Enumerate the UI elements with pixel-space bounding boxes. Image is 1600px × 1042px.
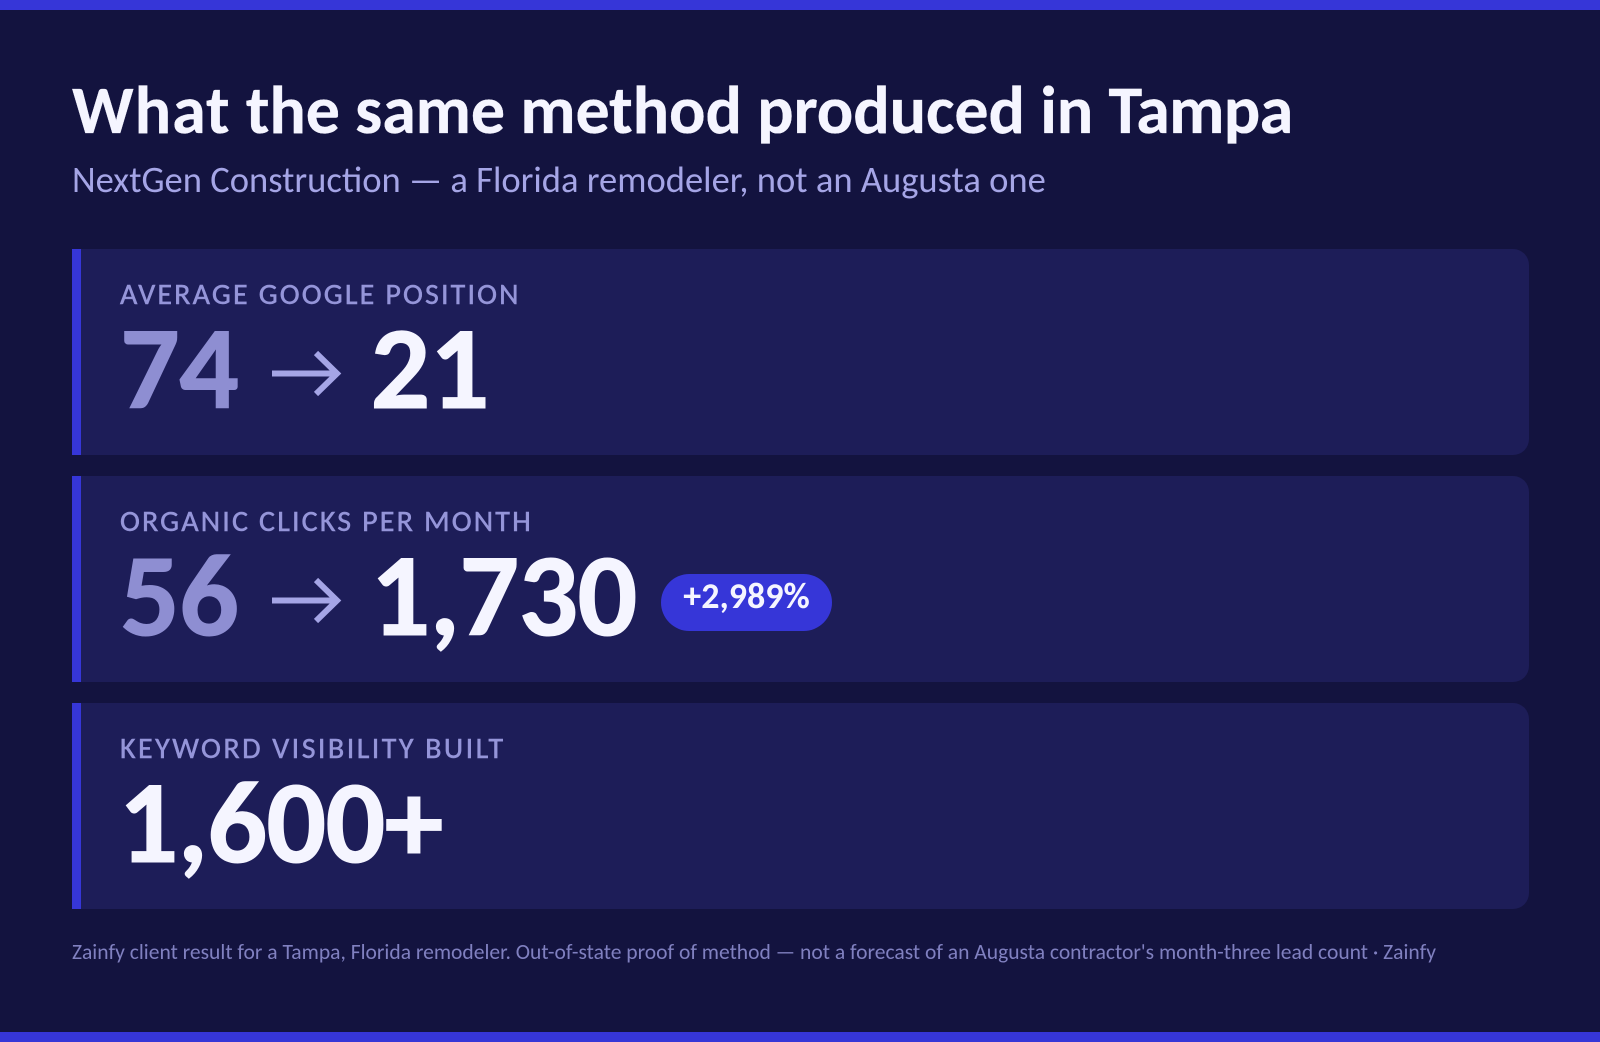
panel: keyword visibility built bbox=[72, 703, 1529, 909]
value: 1,600+ bbox=[118, 750, 443, 894]
panel: average google position bbox=[72, 249, 1529, 455]
after value: 21 bbox=[370, 296, 489, 440]
metric label: ORGANIC CLICKS PER MONTH bbox=[120, 502, 533, 540]
footnote: Zainfy client result for a Tampa, Florida remodeler. Out-of-state proof of method — not a forecast of an Augusta contractor's month-three lead count · Zainfy bbox=[72, 938, 1436, 965]
before value: 74 bbox=[120, 296, 238, 440]
growth badge: +2,989% bbox=[683, 574, 810, 618]
arrow icon bbox=[272, 578, 342, 624]
panel: organic clicks per month bbox=[72, 476, 1529, 682]
before value: 56 bbox=[120, 523, 238, 667]
arrow icon bbox=[272, 350, 342, 396]
top accent bar bbox=[0, 0, 1600, 10]
subtitle: NextGen Construction — a Florida remodeler, not an Augusta one bbox=[72, 157, 1046, 202]
metric label: KEYWORD VISIBILITY BUILT bbox=[120, 730, 506, 766]
metric label: AVERAGE GOOGLE POSITION bbox=[120, 276, 521, 312]
growth badge bbox=[661, 574, 832, 631]
after value: 1,730 bbox=[370, 523, 637, 667]
bottom accent bar bbox=[0, 1032, 1600, 1042]
title: What the same method produced in Tampa bbox=[72, 69, 1292, 152]
